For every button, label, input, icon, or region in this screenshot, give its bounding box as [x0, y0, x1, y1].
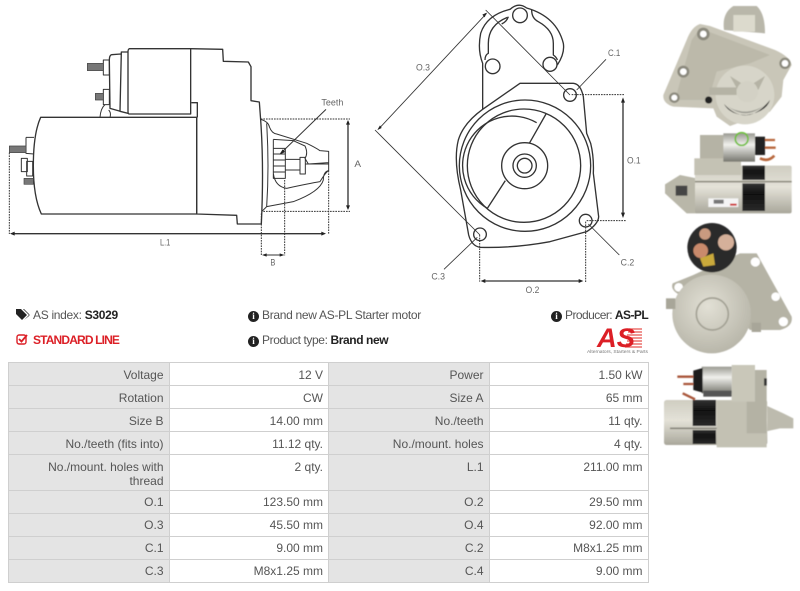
specification table: C.1 [145, 541, 164, 555]
solenoid outline [109, 49, 191, 114]
standard line badge: STANDARD LINE [33, 333, 119, 347]
dimension B: B [270, 258, 275, 268]
producer: i [555, 311, 558, 321]
specification table: CW [303, 390, 323, 404]
producer: Producer: AS-PL [565, 308, 648, 322]
specification table: No./teeth (fits into) [65, 436, 164, 450]
specification table: 211.00 mm [583, 460, 642, 474]
AS logo [587, 323, 649, 355]
specification table: No./mount. holes [393, 436, 484, 450]
terminal bolts [21, 60, 110, 176]
dimension L.1 [9, 153, 329, 255]
photo: rear of starter with solenoid [666, 223, 792, 353]
specification table: 2 qty. [295, 460, 323, 474]
specification table: 12 V [298, 368, 323, 382]
AS logo: AS [596, 323, 635, 353]
callout C.2 [588, 224, 634, 268]
product description: Brand new AS-PL Starter motor [262, 308, 421, 322]
teeth callout: Teeth [321, 98, 343, 108]
drive housing outline [191, 49, 263, 224]
dimension O.1: O.1 [627, 156, 641, 166]
front view technical drawing [375, 5, 641, 295]
specification table: C.3 [145, 564, 164, 578]
specification table: 11 qty. [608, 414, 642, 428]
pinion nose [261, 119, 329, 211]
upper lobe inner outline [485, 10, 557, 60]
specification table: 9.00 mm [276, 541, 323, 555]
dimension O.2: O.2 [526, 285, 539, 295]
callout C.1: C.1 [608, 48, 620, 58]
specification table: C.2 [465, 541, 484, 555]
specification table: 4 qty. [614, 436, 642, 450]
specification table: O.3 [144, 518, 164, 532]
dimension O.1 [572, 95, 641, 221]
specification table: M8x1.25 mm [573, 541, 642, 555]
specification table: Power [449, 368, 484, 382]
specification table: 45.50 mm [270, 518, 323, 532]
product description: i [252, 311, 255, 321]
product type: i [252, 336, 255, 346]
mount holes [474, 8, 592, 241]
specification table: No./mount. holes with thread [48, 460, 164, 488]
photo: front of starter [663, 6, 792, 126]
specification table: L.1 [467, 460, 484, 474]
specification table: 11.12 qty. [272, 436, 323, 450]
callout C.3: C.3 [431, 271, 445, 281]
specification table: M8x1.25 mm [254, 564, 323, 578]
specification table: Size B [129, 414, 164, 428]
AS index: AS index: S3029 [33, 308, 118, 322]
specification table: O.4 [464, 518, 484, 532]
specification table: 29.50 mm [589, 495, 642, 509]
specification table: O.1 [144, 495, 164, 509]
product type: Product type: Brand new [262, 333, 388, 347]
specification table [8, 362, 649, 583]
specification table: 65 mm [606, 390, 642, 404]
dimension L.1: L.1 [160, 238, 170, 248]
motor body outline [33, 117, 197, 214]
specification table: 92.00 mm [589, 518, 642, 532]
teeth callout [279, 98, 343, 155]
photo: side of starter, reverse [664, 365, 793, 447]
dimension A [261, 119, 362, 211]
AS logo: Alternators, Starters & Parts [587, 349, 649, 355]
specification table: Voltage [123, 368, 164, 382]
specification table: C.4 [465, 564, 484, 578]
specification table: 123.50 mm [263, 495, 323, 509]
photo: side of starter with label [665, 133, 792, 213]
specification table: 1.50 kW [598, 368, 642, 382]
specification table: O.2 [464, 495, 484, 509]
callout C.1 [577, 48, 620, 90]
dimension O.2 [480, 222, 586, 295]
dimension O.3 [375, 10, 570, 235]
specification table: 14.00 mm [270, 414, 323, 428]
flange plate outline [456, 5, 599, 247]
specification table: Size A [449, 390, 484, 404]
specification table: 9.00 mm [596, 564, 642, 578]
callout C.3 [431, 237, 477, 281]
dimension B [262, 253, 284, 268]
specification table: Rotation [119, 390, 164, 404]
callout C.2: C.2 [621, 258, 634, 268]
dimension O.3: O.3 [416, 62, 430, 72]
dimension A: A [354, 159, 362, 169]
specification table: No./teeth [435, 414, 484, 428]
side view technical drawing [9, 49, 362, 268]
flange rings [459, 100, 591, 231]
